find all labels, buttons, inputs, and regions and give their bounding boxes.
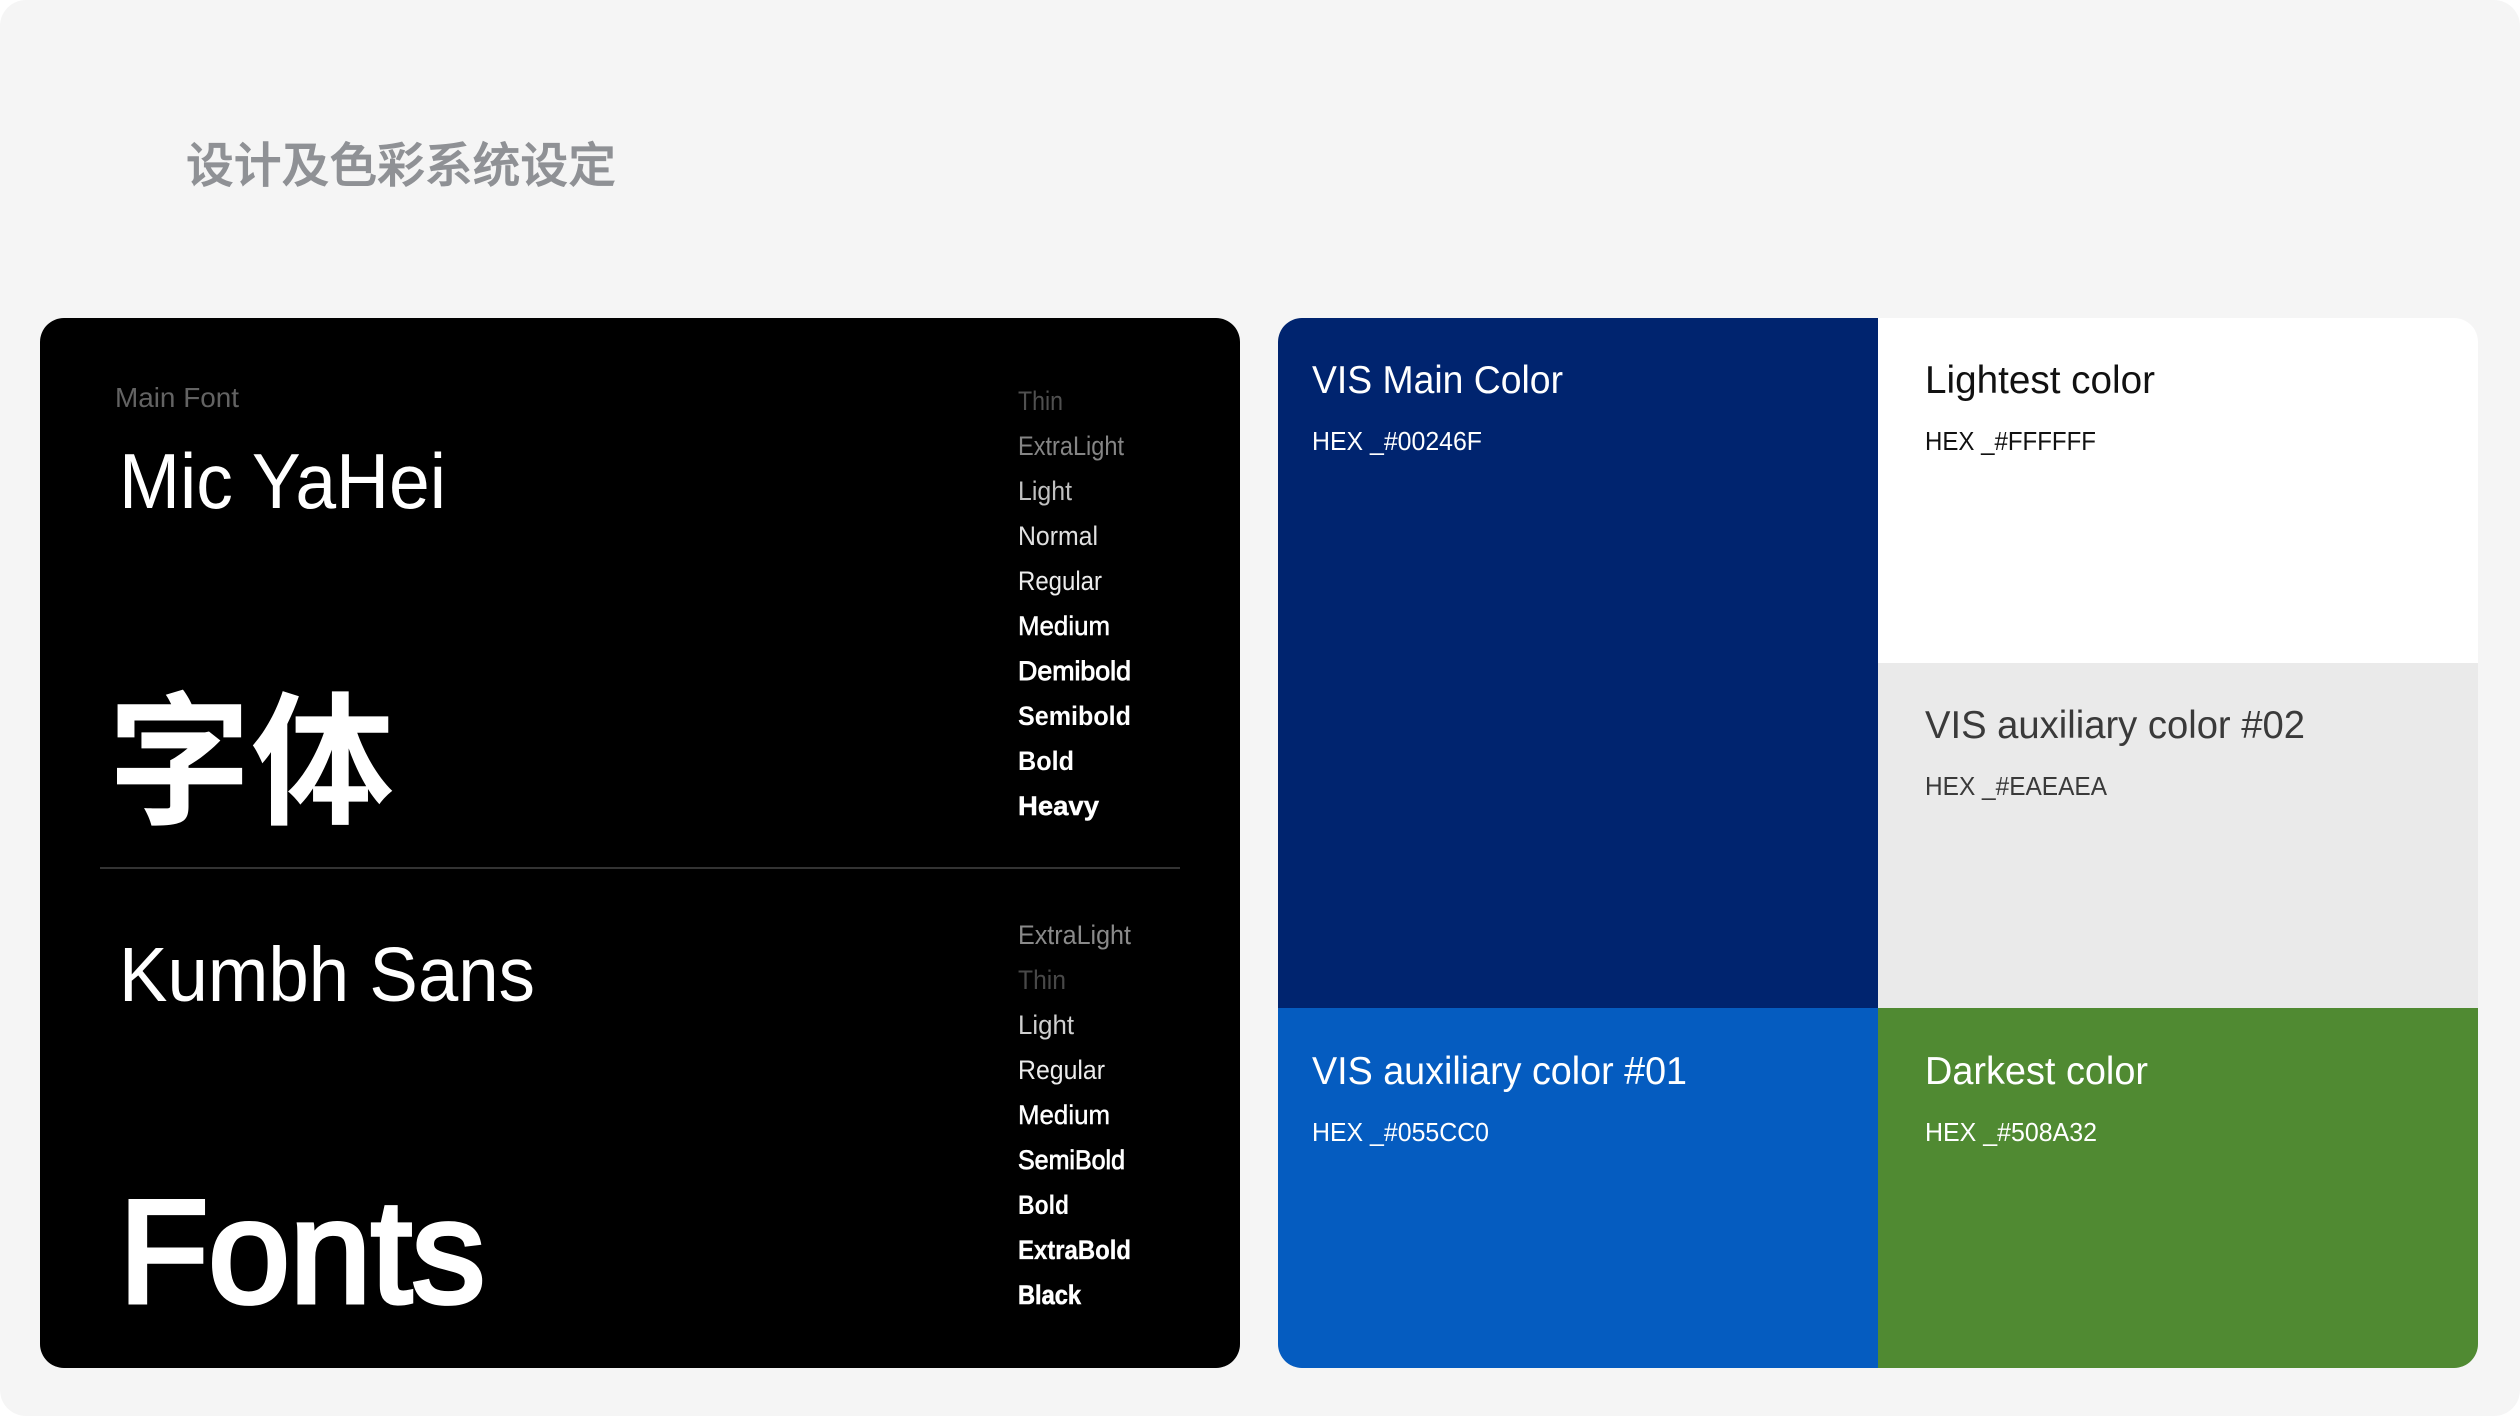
weight list: Kumbh Sans: Thin bbox=[1018, 965, 1066, 995]
panel: colour system bbox=[1278, 318, 2478, 1368]
weight list: Mic YaHei: Regular bbox=[1018, 566, 1102, 596]
swatch: VIS auxiliary color 01: VIS auxiliary color #01 bbox=[1312, 1050, 1687, 1093]
swatch: lightest color bbox=[1878, 318, 2478, 663]
weight list: Mic YaHei: Medium bbox=[1018, 611, 1110, 641]
swatch: VIS main color: VIS Main Color bbox=[1312, 359, 1563, 402]
swatch: darkest color: Darkest color bbox=[1925, 1050, 2148, 1093]
panel: fonts bbox=[40, 318, 1240, 1368]
weight list: Mic YaHei: Heavy bbox=[1018, 791, 1099, 821]
weight list: Mic YaHei: Semibold bbox=[1018, 701, 1131, 731]
weight list: Mic YaHei: Light bbox=[1018, 476, 1072, 506]
swatch: VIS auxiliary color 01: HEX _#055CC0 bbox=[1312, 1117, 1489, 1147]
font name: Kumbh Sans: Kumbh Sans bbox=[119, 932, 535, 1018]
swatch: VIS main color: HEX _#00246F bbox=[1312, 426, 1482, 456]
sample word: Fonts: Fonts bbox=[119, 1170, 485, 1333]
swatch: lightest color: HEX _#FFFFFF bbox=[1925, 426, 2096, 456]
weight list: Mic YaHei bbox=[1018, 386, 1131, 821]
weight list: Kumbh Sans: Light bbox=[1018, 1010, 1074, 1040]
weight list: Kumbh Sans: Medium bbox=[1018, 1100, 1110, 1130]
weight list: Mic YaHei: Thin bbox=[1018, 386, 1063, 416]
main font label: Main Font bbox=[115, 382, 239, 413]
weight list: Kumbh Sans: Bold bbox=[1018, 1190, 1069, 1220]
swatch: VIS auxiliary color 02 bbox=[1878, 663, 2478, 1008]
weight list: Mic YaHei: Bold bbox=[1018, 746, 1074, 776]
swatch: darkest color: HEX _#508A32 bbox=[1925, 1117, 2097, 1147]
swatch: VIS main color bbox=[1278, 318, 1878, 1008]
font name: Mic YaHei: Mic YaHei bbox=[119, 437, 446, 525]
weight list: Mic YaHei: Normal bbox=[1018, 521, 1098, 551]
weight list: Kumbh Sans: Regular bbox=[1018, 1055, 1105, 1085]
swatch: darkest color bbox=[1878, 1008, 2478, 1368]
weight list: Mic YaHei: Demibold bbox=[1018, 656, 1131, 686]
weight list: Kumbh Sans bbox=[1018, 920, 1131, 1310]
weight list: Mic YaHei: ExtraLight bbox=[1018, 431, 1124, 461]
weight list: Kumbh Sans: ExtraLight bbox=[1018, 920, 1131, 950]
title: 设计及色彩系统设定 bbox=[186, 126, 616, 196]
sample glyphs: 字体: 字体 bbox=[108, 647, 394, 855]
swatch: lightest color: Lightest color bbox=[1925, 359, 2155, 402]
swatch: VIS auxiliary color 02: HEX _#EAEAEA bbox=[1925, 771, 2108, 801]
swatch: VIS auxiliary color 01 bbox=[1278, 1008, 1878, 1368]
swatch: VIS auxiliary color 02: VIS auxiliary color #02 bbox=[1925, 704, 2305, 747]
weight list: Kumbh Sans: Black bbox=[1018, 1280, 1082, 1310]
weight list: Kumbh Sans: ExtraBold bbox=[1018, 1235, 1131, 1265]
weight list: Kumbh Sans: SemiBold bbox=[1018, 1145, 1125, 1175]
